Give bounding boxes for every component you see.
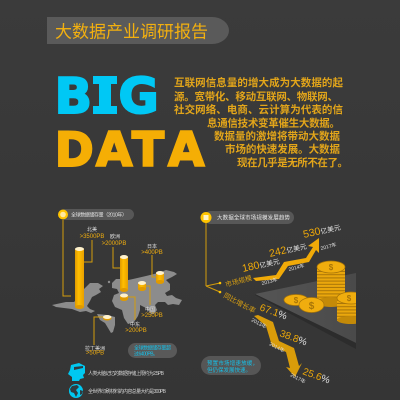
intro paragraph: 数据量的激增将带动大数据 [214,130,340,142]
coins [284,261,365,324]
cylinder: Japan [141,243,164,284]
connector lines [63,220,156,345]
plate [255,273,356,349]
cylinder: Europe: >2000PB [102,241,126,247]
callout: market outlook: 预置市场增速放缓， [207,359,258,367]
cylinder: Latin America [85,315,112,356]
cylinder: China: >250PB [141,313,163,319]
cylinder: China: 中国 [145,306,155,313]
headline: DATA: A [96,123,133,178]
growth rate values: 38.8% [278,328,308,349]
intro paragraph: 息通信技术变革催生大数据。 [207,116,340,130]
icon: head [68,363,85,381]
cylinder: North America: >3500PB [80,234,104,240]
coins: $ [294,296,299,305]
cylinder: China [138,281,163,319]
legend pill: market trend [200,211,294,224]
cylinder: Middle East [120,294,147,334]
intro paragraph: 源。宽带化、移动互联网、物联网、 [174,90,338,103]
cylinder: Japan: >400PB [141,250,163,256]
callout: global storage total: 过6400PB。 [134,350,158,358]
connector lines [206,223,220,292]
callout: global storage total [128,343,177,358]
icon: globe [69,384,83,398]
growth rate values: 2017年 [289,372,307,385]
market size values: 180亿美元 [241,255,281,275]
label: YoY growth: 同比增长率 [222,291,257,315]
arrow: market size rising [253,238,319,281]
cylinder: Middle East: >200PB [125,328,147,334]
cylinder: North America: 北美 [87,226,97,233]
headline: BIG: B [55,68,92,125]
market size values: 2014年 [288,262,305,273]
stat: human brain: 人类大脑记忆的数据存储上限约为2.5PB [88,370,165,377]
coins: $ [329,263,334,272]
market size values: 2017年 [320,241,337,252]
intro paragraph: 市场的快速发展。大数据 [225,142,340,156]
legend pill: global data storage [58,209,134,220]
intro paragraph: 互联网信息量的增大成为大数据的起 [174,76,344,89]
headline: DATA: A [168,123,205,178]
panel: global data storage [52,209,182,398]
market size values: 530亿美元 [302,221,342,241]
intro paragraph: 社交网络、电商、云计算为代表的信 [174,103,344,116]
coins: $ [347,294,352,303]
stat: world printed material: 全世界印刷材料的内容总量大约是300PB [88,388,167,395]
growth rate values: 2013年 [250,317,268,330]
cylinder: Latin America: 拉丁美洲 [85,345,105,352]
callout: market outlook [201,356,261,375]
headline: DATA: T [132,123,164,178]
cylinder: Europe [102,233,128,292]
headline: BIG: G [118,68,159,125]
infographic canvas [47,17,356,398]
cylinder: Europe: 欧洲 [110,233,120,240]
legend pill: global data storage: 全球数据储存量（2010年） [71,212,127,218]
growth rate values: 2014年 [268,341,286,354]
cylinder: North America [75,226,104,309]
cylinder: Japan: 日本 [147,243,157,250]
growth rate values: 67.1% [258,302,288,323]
arrow: growth rate falling [254,315,302,377]
intro paragraph: 现在几乎是无所不在了。 [237,156,348,169]
market size values: 242亿美元 [268,240,308,260]
callout: market outlook: 但仍保发展快速。 [207,366,251,374]
headline: DATA [55,123,205,178]
market size values [241,221,342,287]
title bar: 大数据产业调研报告 [55,22,208,42]
intro paragraph [174,76,348,169]
market size values: 2013年 [261,276,278,287]
legend pill: market trend: 大数据全球市场规模发展趋势 [217,214,290,222]
cylinder: Middle East: 中东 [130,321,140,328]
callout: global storage total: 全球数据储存量超 [134,344,171,352]
coins: $ [309,301,315,312]
panel: market trend [200,211,365,387]
label: market size: 市场规模 [224,273,253,289]
growth rate values: 25.6% [301,366,331,387]
cylinder: Latin America: >50PB [86,350,104,356]
growth rate values [250,302,331,387]
headline: DATA: D [55,123,94,178]
title bar [47,17,229,44]
connector dots [219,282,221,293]
world map [52,270,182,333]
headline: BIG [55,68,159,125]
